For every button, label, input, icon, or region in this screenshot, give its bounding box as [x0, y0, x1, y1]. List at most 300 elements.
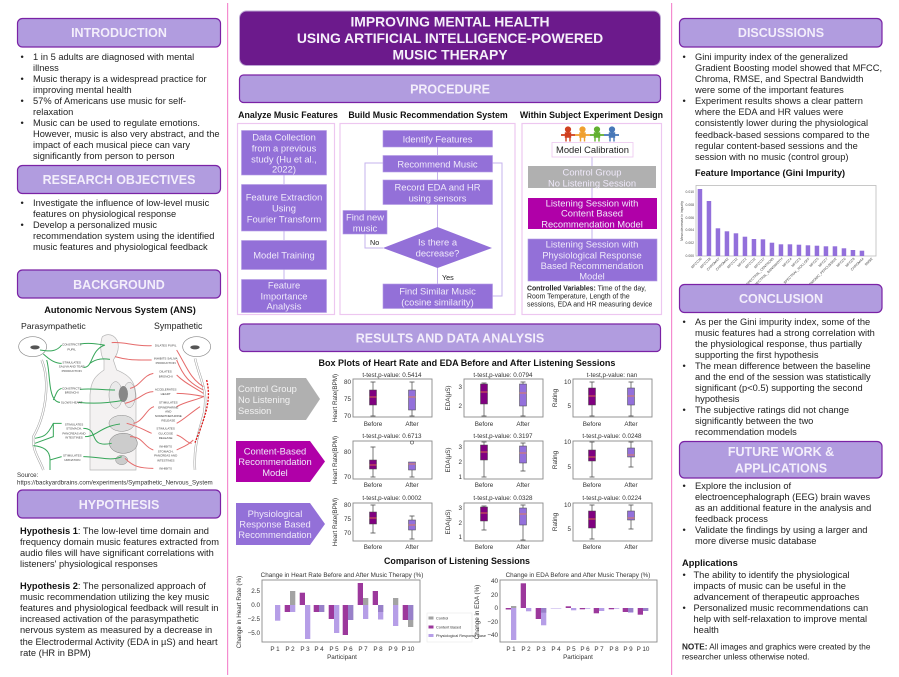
- diagram: autonomic nervous system: STOMACH,: [66, 427, 82, 431]
- box plot: control EDA: EDA(µS): [445, 386, 452, 410]
- text: conclusion bullets: •: [682, 317, 686, 327]
- box plot: physiological rating: Before: [583, 544, 602, 551]
- step: recommend music: [383, 156, 492, 172]
- bar chart: feature importance: 0.002: [686, 241, 694, 245]
- panel: research objectives: [18, 166, 220, 252]
- text: controlled variables: sessions, EDA and HR measuring device: [527, 302, 653, 308]
- text: introduction bullets: significantly from person to person: [33, 151, 175, 161]
- box plot: physiological rating: 5: [567, 526, 571, 533]
- box plot: content heart rate: 80: [344, 449, 351, 456]
- box plot: control rating: 10: [564, 379, 571, 386]
- diagram: autonomic nervous system: BRONCHI: [159, 374, 173, 378]
- panel: discussions: [680, 18, 882, 290]
- box plot: physiological EDA: 2: [458, 520, 462, 527]
- box plot: control heart rate: t-test,p-value: 0.5414: [362, 372, 422, 379]
- bar chart: change in EDA: −40: [487, 632, 498, 639]
- step: physiological response model: Based Recommendation: [541, 260, 643, 271]
- box plot: physiological EDA: After: [516, 544, 530, 551]
- bar chart: change in heart rate: P 8: [373, 646, 383, 653]
- text: hypothesis 2: features and physiological feedback will result in: [20, 603, 218, 613]
- bar chart: feature importance: MFCC4: [782, 257, 793, 268]
- step: model calibration: [552, 142, 633, 157]
- box plot: control EDA: Before: [475, 421, 494, 428]
- box plot: control rating: After: [624, 421, 638, 428]
- text: introduction bullets: •: [20, 74, 24, 84]
- step: data collection: Data Collection: [252, 132, 316, 142]
- bar chart: change in EDA: P 7: [594, 646, 604, 653]
- heading: results and data analysis: [240, 324, 660, 352]
- diagram: autonomic nervous system: INHIBITS: [159, 445, 172, 449]
- title banner: [240, 11, 660, 66]
- text: applications bullets: advancement of therapeutic approaches: [694, 592, 860, 602]
- text: conclusion bullets: and the end of the session was statistically: [695, 372, 871, 382]
- text: hypothesis 2: music recommendation utilizing the key music: [20, 592, 209, 602]
- step: content based model: Listening Session with: [546, 198, 638, 208]
- diagram: autonomic nervous system: [19, 335, 211, 471]
- step: record EDA and HR: using sensors: [409, 192, 467, 204]
- bar chart: feature importance: MFCC3: [791, 257, 802, 268]
- heading: conclusion: CONCLUSION: [739, 292, 823, 306]
- box plot: content EDA: 1: [458, 474, 462, 481]
- box plot: content rating: After: [624, 482, 638, 489]
- text: future work bullets: Explore the inclusion of: [695, 481, 792, 491]
- bar chart: change in heart rate: P 1: [270, 646, 280, 653]
- box plot: physiological rating: After: [624, 544, 638, 551]
- box plot: content EDA: t-test,p-value: 0.3197: [473, 433, 533, 440]
- label: yes: Yes: [442, 273, 454, 282]
- text: conclusion bullets: As per the Gini impurity index, some of the: [695, 317, 870, 327]
- diagram: autonomic nervous system: PRODUCTION: [62, 369, 82, 373]
- heading: discussions: [680, 18, 882, 47]
- arrow: control group: No Listening: [238, 394, 290, 405]
- step: feature extraction: Feature Extraction: [246, 192, 322, 202]
- text: introduction bullets: Music therapy is a widespread practice for: [33, 74, 207, 84]
- box plot: content EDA: 3: [458, 444, 462, 451]
- box plot: physiological EDA: EDA(µS): [445, 510, 452, 534]
- arrow: control group: Session: [238, 405, 271, 416]
- diagram: autonomic nervous system: STIMULATES: [156, 427, 175, 431]
- bar chart: feature importance: MFCC12: [726, 257, 739, 269]
- diagram: autonomic nervous system: RELEASE: [161, 419, 175, 423]
- diagram: autonomic nervous system: STIMULATES: [65, 422, 83, 426]
- legend: Physiological Response Base: [436, 634, 486, 638]
- text: hypothesis 2: increased activation of the parasympathetic: [20, 614, 199, 624]
- arrow: content based model: [236, 441, 325, 482]
- text: conclusion bullets: recommendation models: [695, 427, 797, 437]
- panel: hypothesis: [18, 490, 220, 658]
- box plot: control rating: 5: [567, 403, 571, 410]
- bar chart: change in heart rate: 0.0: [251, 602, 260, 609]
- panel: conclusion: [680, 284, 882, 437]
- arrow: control group: [236, 378, 320, 420]
- bar chart: feature importance: SPECTRAL_ROLLOFF: [783, 257, 811, 285]
- text: introduction bullets: illness: [33, 63, 59, 73]
- text: discussions bullets: Gini impurity index of the generalized: [695, 52, 848, 62]
- bar chart: feature importance: MFCC20: [690, 257, 703, 269]
- step: find similar music: [383, 284, 492, 308]
- bar chart: change in heart rate: 2.5: [251, 588, 260, 595]
- diagram: autonomic nervous system: INHIBITS: [159, 467, 172, 471]
- bar chart: feature importance: CHROMA7: [706, 257, 721, 272]
- arrow: control group: Control Group: [238, 383, 297, 394]
- diagram: autonomic nervous system: BRONCHI: [65, 391, 79, 395]
- text: conclusion bullets: •: [682, 405, 686, 415]
- title banner: USING ARTIFICIAL INTELLIGENCE-POWERED: [297, 30, 603, 46]
- heading: background: BACKGROUND: [73, 278, 165, 292]
- heading: future work and applications: [680, 442, 882, 478]
- text: conclusion bullets: music features had a strong correlation with: [695, 328, 875, 338]
- text: conclusion bullets: [682, 317, 875, 437]
- diagram: autonomic nervous system: DILATES PUPIL: [155, 343, 177, 347]
- bar chart: change in EDA: P 6: [580, 646, 590, 653]
- bar chart: change in EDA: P 5: [566, 646, 576, 653]
- heading: research objectives: [18, 166, 220, 194]
- diagram: autonomic nervous system: STOMACH,: [158, 449, 174, 453]
- text: hypothesis 2: rate (HR in BPM): [20, 648, 91, 658]
- step: find new music: music: [353, 222, 378, 234]
- step: find similar music: Find Similar Music: [399, 286, 476, 296]
- text: hypothesis 1: Hypothesis 1: The low-level time domain and: [20, 526, 209, 536]
- box plot: content rating: Rating: [552, 450, 559, 469]
- diagram: autonomic nervous system: NOREPINEPHRINE: [155, 414, 182, 418]
- text: introduction bullets: •: [20, 96, 24, 106]
- text: conclusion bullets: hypothesis: [695, 394, 740, 404]
- text: future work bullets: as an additional feature in the analysis and: [695, 503, 871, 513]
- text: conclusion bullets: the physiological response, thus partially: [695, 339, 862, 349]
- heading: research objectives: RESEARCH OBJECTIVES: [43, 173, 195, 187]
- decision: is there a decrease: Is there a: [418, 236, 458, 248]
- text: discussions bullets: •: [682, 52, 686, 62]
- bar chart: change in heart rate: P 7: [358, 646, 368, 653]
- step: identify features: [383, 130, 492, 147]
- bar chart: feature importance: Mean decrease in impurity: [680, 201, 684, 241]
- legend: Content Based: [436, 626, 461, 630]
- diagram: autonomic nervous system: STIMULATES: [159, 401, 178, 405]
- subheading: within subject experiment design: Within Subject Experiment Design: [520, 110, 663, 120]
- arrow: physiological response model: [236, 503, 325, 545]
- flow connectors: [365, 147, 502, 296]
- arrow: content based model: Recommendation: [238, 456, 312, 467]
- box plot: content heart rate: Heart Rate(BPM): [332, 436, 339, 484]
- box plot: physiological heart rate: 80: [344, 502, 351, 509]
- diagram: autonomic nervous system: CONSTRICTS: [62, 343, 81, 347]
- text: future work bullets: •: [682, 481, 686, 491]
- diagram: autonomic nervous system: PRODUCTION: [156, 361, 176, 365]
- bar chart: feature importance: SPECTRAL_BANDWIDTH: [752, 256, 784, 288]
- text: hypothesis 1: frequency domain music features extracted from: [20, 537, 219, 547]
- bar chart: change in EDA: P 4: [551, 646, 561, 653]
- diagram: autonomic nervous system: PUPIL: [67, 347, 76, 351]
- bar chart: feature importance: 0.010: [686, 190, 694, 194]
- box plot: content rating: Before: [583, 482, 602, 489]
- bar chart: feature importance: RMSE: [864, 256, 874, 267]
- text: objectives bullets: Develop a personalized music: [33, 220, 157, 230]
- label: parasympathetic: Parasympathetic: [21, 321, 86, 331]
- step: data collection: [242, 130, 326, 175]
- bar chart: feature importance: MFCC18: [699, 257, 712, 269]
- text: objectives bullets: [20, 198, 214, 252]
- text: future work bullets: electroencephalograph (EEG) brain waves: [695, 492, 871, 502]
- text: introduction bullets: 1 in 5 adults are diagnosed with mental: [33, 52, 194, 62]
- step: find new music: [343, 210, 387, 234]
- text: applications bullets: help with self-relaxation to improve mental: [694, 614, 867, 624]
- heading: introduction: [18, 18, 220, 47]
- heading: future work and applications: APPLICATIONS: [735, 462, 827, 476]
- diagram: autonomic nervous system: SALIVA AND TEAR: [59, 365, 85, 369]
- step: record EDA and HR: [383, 180, 492, 204]
- box plot: content rating: 5: [567, 464, 571, 471]
- label: no: No: [370, 238, 379, 247]
- title banner: MUSIC THERAPY: [392, 46, 508, 62]
- diagram: autonomic nervous system: INTESTINES: [65, 436, 83, 440]
- box plot: content rating: [552, 433, 652, 489]
- heading: hypothesis: [18, 490, 220, 518]
- diagram: autonomic nervous system: HEART: [161, 392, 171, 396]
- bar chart: change in heart rate: P 4: [314, 646, 324, 653]
- box plot: control EDA: After: [516, 421, 530, 428]
- text: discussions bullets: [682, 52, 882, 162]
- diagram: autonomic nervous system: PANCREAS AND: [62, 431, 86, 435]
- bar chart: change in heart rate: P 5: [329, 646, 339, 653]
- arrow: content based model: Content-Based: [244, 446, 306, 456]
- decision: is there a decrease: [383, 227, 492, 268]
- bar chart: change in heart rate: P 9: [388, 646, 398, 653]
- text: introduction bullets: •: [20, 52, 24, 62]
- text: introduction bullets: improving mental health: [33, 85, 132, 95]
- box plot: physiological EDA: Before: [475, 544, 494, 551]
- bar chart: feature importance: [680, 186, 876, 290]
- title banner: IMPROVING MENTAL HEALTH: [350, 14, 550, 30]
- icon: four people holding hands: [561, 127, 619, 142]
- bar chart: feature importance: MFCC5: [809, 257, 820, 268]
- box plot: physiological rating: t-test,p-value: 0.0224: [582, 495, 642, 502]
- step: data collection: 2022): [272, 164, 296, 174]
- text: applications bullets: The ability to identify the physiological: [694, 570, 850, 580]
- bar chart: feature importance: 0.000: [686, 254, 694, 258]
- text: objectives bullets: music features and physiological feedback: [33, 242, 208, 252]
- bar chart: change in EDA: P 10: [637, 646, 650, 653]
- panel: within subject experiment design: [520, 110, 663, 314]
- diagram: autonomic nervous system: INHIBITS SALIVA: [154, 356, 177, 360]
- text: discussions bullets: feedback-based sessions compared to the: [695, 130, 870, 140]
- text: applications bullets: health: [694, 625, 719, 635]
- panel: introduction: [18, 18, 220, 161]
- step: physiological response model: [528, 238, 657, 282]
- text: applications bullets: •: [682, 603, 686, 613]
- bar chart: feature importance: MFCC2: [737, 257, 748, 268]
- box plot: control rating: Before: [583, 421, 602, 428]
- heading: introduction: INTRODUCTION: [71, 26, 167, 40]
- text: introduction bullets: Music can be used to regulate emotions.: [33, 118, 200, 128]
- arrow: content based model: Model: [262, 467, 288, 478]
- bar chart: change in EDA: 0: [494, 605, 498, 612]
- text: controlled variables: Controlled Variables: Time of the day,: [527, 286, 646, 292]
- subheading: feature importance: Feature Importance (Gini Impurity): [695, 168, 845, 178]
- box plot: control heart rate: 75: [344, 396, 351, 403]
- bar chart: feature importance: MFCC7: [818, 257, 829, 268]
- subheading: applications: Applications: [682, 558, 738, 568]
- source note: Source:: [17, 472, 39, 479]
- bar chart: change in EDA: Change in EDA Before and After Music Therapy (%): [506, 572, 650, 579]
- text: conclusion bullets: significantly between the two: [695, 416, 813, 426]
- bar chart: change in heart rate: P 10: [402, 646, 415, 653]
- bar chart: feature importance: MFCC9: [845, 257, 856, 268]
- step: feature extraction: Using: [272, 202, 296, 214]
- box plot: content EDA: EDA(µS): [445, 448, 452, 472]
- diagram: autonomic nervous system: AND: [165, 410, 172, 414]
- text: hypothesis 2: [20, 581, 218, 658]
- step: record EDA and HR: Record EDA and HR: [395, 182, 481, 192]
- text: discussions bullets: were some of the important features: [694, 85, 844, 95]
- text: conclusion bullets: supporting the first hypothesis: [695, 350, 819, 360]
- bar chart: change in heart rate: −2.5: [248, 616, 260, 623]
- heading: procedure: PROCEDURE: [410, 82, 490, 96]
- heading: background: [18, 270, 220, 298]
- box plot: physiological heart rate: t-test,p-value: 0.0002: [362, 495, 422, 502]
- bar chart: change in heart rate: Change in Heart Rate Before and After Music Therapy (%): [261, 572, 423, 579]
- diagram: autonomic nervous system: GLUCOSE: [158, 431, 173, 435]
- box plot: physiological heart rate: Heart Rate(BPM): [332, 498, 339, 546]
- step: feature importance: Feature: [268, 280, 300, 290]
- text: conclusion bullets: The subjective ratings did not change: [695, 405, 849, 415]
- text: introduction bullets: relaxation: [33, 107, 73, 117]
- text: objectives bullets: •: [20, 198, 24, 208]
- diagram: autonomic nervous system: STIMULATES: [63, 454, 82, 458]
- bar chart: change in EDA: 20: [491, 592, 498, 599]
- arrow: physiological response model: Physiological: [248, 508, 302, 519]
- panel: future work and applications: [680, 442, 882, 662]
- text: applications bullets: Personalized music recommendations can: [694, 603, 868, 613]
- box plot: control rating: t-test,p-value: nan: [587, 372, 638, 379]
- diagram: autonomic nervous system: PANCREAS AND: [154, 454, 178, 458]
- diagram: autonomic nervous system: EPINEPHRINE: [158, 405, 178, 409]
- box plot: control EDA: [445, 372, 543, 428]
- box plot: physiological EDA: 1: [458, 534, 462, 541]
- box plot: content rating: 10: [564, 439, 571, 446]
- text: hypothesis 2: Hypothesis 2: The personalized approach of: [20, 581, 206, 591]
- step: recommend music: Recommend Music: [397, 158, 478, 170]
- box plot: control heart rate: 70: [344, 413, 351, 420]
- box plot: control heart rate: [332, 372, 432, 428]
- text: hypothesis 2: nervous system as measured by a decrease in: [20, 625, 212, 635]
- text: discussions bullets: Gradient Boosting model showed that MFCC,: [695, 63, 882, 73]
- step: control group: [528, 166, 656, 188]
- bar chart: change in EDA: −20: [487, 619, 498, 626]
- bar chart: feature importance: CHROMA4: [850, 257, 865, 272]
- panel: background: [17, 270, 220, 486]
- text: conclusion bullets: significant (p<0.5) supporting the second: [695, 383, 863, 393]
- bar chart: change in heart rate: Participant: [327, 654, 357, 661]
- chart title: box plots: Box Plots of Heart Rate and EDA Before and After Listening Sessions: [319, 358, 615, 368]
- bar chart: change in EDA: Change in EDA (%): [474, 585, 481, 639]
- text: discussions bullets: consistently lower during the physiological: [695, 118, 868, 128]
- text: discussions bullets: Experiment results shows a clear pattern: [695, 96, 863, 106]
- text: discussions bullets: where the EDA and HR values were: [694, 107, 843, 117]
- box plot: control heart rate: Heart Rate(BPM): [332, 374, 339, 422]
- box plot: control rating: [552, 372, 652, 428]
- box plot: content heart rate: [332, 433, 432, 489]
- box plot: content heart rate: t-test,p-value: 0.6713: [362, 433, 422, 440]
- box plot: content heart rate: 70: [344, 474, 351, 481]
- bar chart: change in EDA: P 3: [536, 646, 546, 653]
- bar chart: change in EDA: P 2: [521, 646, 531, 653]
- legend: Control: [436, 616, 448, 620]
- text: conclusion bullets: •: [682, 361, 686, 371]
- note: NOTE: All images and graphics were created by the: [682, 642, 871, 652]
- bar chart: change in EDA: 40: [491, 578, 498, 585]
- diagram: autonomic nervous system: URINATION: [64, 458, 80, 462]
- text: future work bullets: feedback process: [695, 514, 768, 524]
- box plot: control heart rate: 80: [344, 379, 351, 386]
- box plot: content EDA: After: [516, 482, 530, 489]
- text: introduction bullets: •: [20, 118, 24, 128]
- panel: analyze music features: [238, 110, 338, 314]
- heading: future work and applications: FUTURE WORK &: [728, 445, 834, 459]
- step: control group: Control Group: [563, 166, 621, 178]
- box plot: control heart rate: After: [405, 421, 419, 428]
- text: introduction bullets: 57% of Americans use music for self-: [33, 96, 186, 106]
- source note: [17, 472, 213, 486]
- bar chart: change in heart rate: −5.0: [248, 630, 260, 637]
- note: researcher unless otherwise noted.: [682, 652, 809, 662]
- legend: [427, 613, 486, 642]
- panel: build music recommendation system: [340, 110, 515, 314]
- bar chart: change in EDA: Participant: [563, 654, 593, 661]
- box plot: control EDA: 2: [458, 403, 462, 410]
- box plot: content EDA: [445, 433, 543, 489]
- chart title: comparison of listening sessions: Comparison of Listening Sessions: [384, 556, 530, 566]
- subheading: build music recommendation system: Build Music Recommendation System: [348, 110, 508, 120]
- diagram: autonomic nervous system: CONSTRICTS: [62, 386, 81, 390]
- step: physiological response model: Model: [579, 270, 605, 282]
- box plot: content heart rate: After: [405, 482, 419, 489]
- text: conclusion bullets: The mean difference between the baseline: [695, 361, 871, 371]
- box plot: physiological rating: 10: [564, 502, 571, 509]
- diagram: autonomic nervous system: INTESTINES: [157, 458, 174, 462]
- box plot: physiological heart rate: Before: [364, 544, 383, 551]
- box plot: control EDA: t-test,p-value: 0.0794: [473, 372, 533, 379]
- step: find new music: Find new: [346, 212, 384, 222]
- text: discussions bullets: •: [682, 96, 686, 106]
- step: feature extraction: [242, 184, 326, 231]
- heading: conclusion: [680, 284, 882, 312]
- bar chart: change in heart rate: [236, 572, 423, 661]
- step: physiological response model: Listening Session with: [546, 238, 638, 250]
- box plot: physiological EDA: t-test,p-value: 0.0328: [473, 495, 533, 502]
- bar chart: change in heart rate: P 2: [285, 646, 295, 653]
- diagram: autonomic nervous system: RELEASE: [159, 436, 173, 440]
- heading: procedure: [240, 75, 660, 102]
- text: controlled variables: Room Temperature, Length of the: [527, 294, 630, 300]
- step: model training: [242, 240, 326, 270]
- bar chart: feature importance: MFCC17: [753, 257, 766, 269]
- box plot: physiological heart rate: After: [405, 544, 419, 551]
- bar chart: feature importance: 0.004: [686, 228, 694, 232]
- step: model training: Model Training: [253, 250, 315, 260]
- bar chart: feature importance: CHROMA2: [715, 257, 730, 272]
- bar chart: feature importance: HARMONIC_PERCUSSIVE: [805, 256, 838, 290]
- subheading: analyze music features: Analyze Music Features: [238, 110, 338, 120]
- step: find similar music: (cosine similarity): [401, 296, 474, 308]
- box plot: physiological heart rate: 75: [344, 516, 351, 523]
- arrow: physiological response model: Recommendation: [238, 529, 312, 540]
- box plot: physiological rating: Rating: [552, 512, 559, 531]
- box plot: physiological rating: [552, 495, 652, 551]
- step: content based model: Content Based: [561, 208, 623, 218]
- text: hypothesis 2: the Electrodermal Activity (EDA in µS) and heart: [20, 637, 218, 647]
- diagram: autonomic nervous system: STIMULATES: [62, 360, 81, 364]
- text: introduction bullets: impact of each musical piece can vary: [33, 140, 190, 150]
